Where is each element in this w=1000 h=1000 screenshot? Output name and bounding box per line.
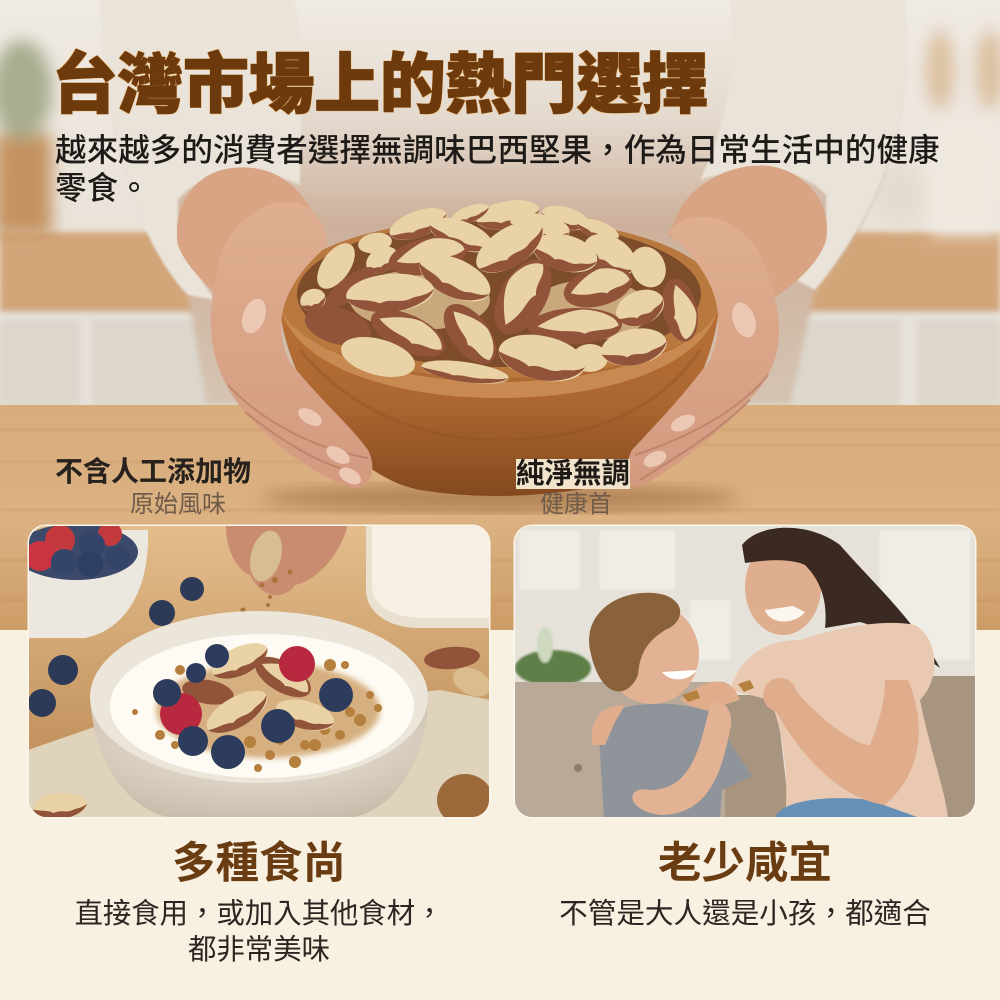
hero photo: hands holding a wooden bowl of Brazil nuts — [0, 0, 1000, 630]
kitchen background — [0, 0, 1000, 630]
forearms — [177, 165, 827, 300]
loose nuts — [32, 645, 496, 826]
feature label: pure unseasoned: 純淨無調 — [516, 458, 630, 490]
heading: varied food uses: 多種食尚 — [172, 840, 346, 888]
intro paragraph — [55, 132, 940, 206]
right hand — [626, 217, 779, 487]
Brazil nuts — [297, 196, 703, 389]
hand sprinkling granola — [226, 524, 348, 632]
yogurt bowl — [90, 611, 428, 818]
heading: all ages: 老少咸宜 — [658, 840, 832, 888]
feature label: no additives: 原始風味 — [130, 491, 226, 518]
intro paragraph: 越來越多的消費者選擇無調味巴西堅果，作為日常生活中的健康 — [55, 132, 940, 168]
bottom section: varied food uses — [74, 840, 444, 966]
bottom section: all ages — [559, 840, 931, 930]
sofa — [514, 676, 976, 818]
boy — [589, 593, 754, 818]
berry bowl — [14, 522, 148, 638]
title: 台灣市場上的熱門選擇 — [52, 48, 708, 121]
wooden bowl — [278, 218, 720, 496]
feature label: no additives — [55, 456, 251, 518]
table and cloth — [28, 524, 490, 818]
mother — [680, 528, 948, 818]
feature label: pure unseasoned: 健康首 — [540, 491, 612, 518]
plant — [515, 627, 591, 686]
wooden table — [0, 405, 1000, 630]
loose blueberries — [28, 577, 204, 717]
description: varied food uses: 直接食用，或加入其他食材， — [74, 898, 444, 930]
person's torso, apron and sleeves — [100, 0, 907, 405]
left hand — [211, 202, 372, 488]
room wall — [514, 524, 976, 818]
photo card: yogurt bowl with nuts — [29, 526, 489, 817]
description: varied food uses: 都非常美味 — [188, 934, 330, 966]
intro paragraph: 零食。 — [55, 170, 150, 206]
photo card: mother and son sharing nuts — [515, 526, 975, 817]
feature label: pure unseasoned — [516, 458, 630, 518]
description: varied food uses — [74, 898, 444, 966]
feature label: no additives: 不含人工添加物 — [55, 456, 251, 487]
description: all ages: 不管是大人還是小孩，都適合 — [559, 898, 931, 930]
milk glass — [366, 524, 490, 628]
